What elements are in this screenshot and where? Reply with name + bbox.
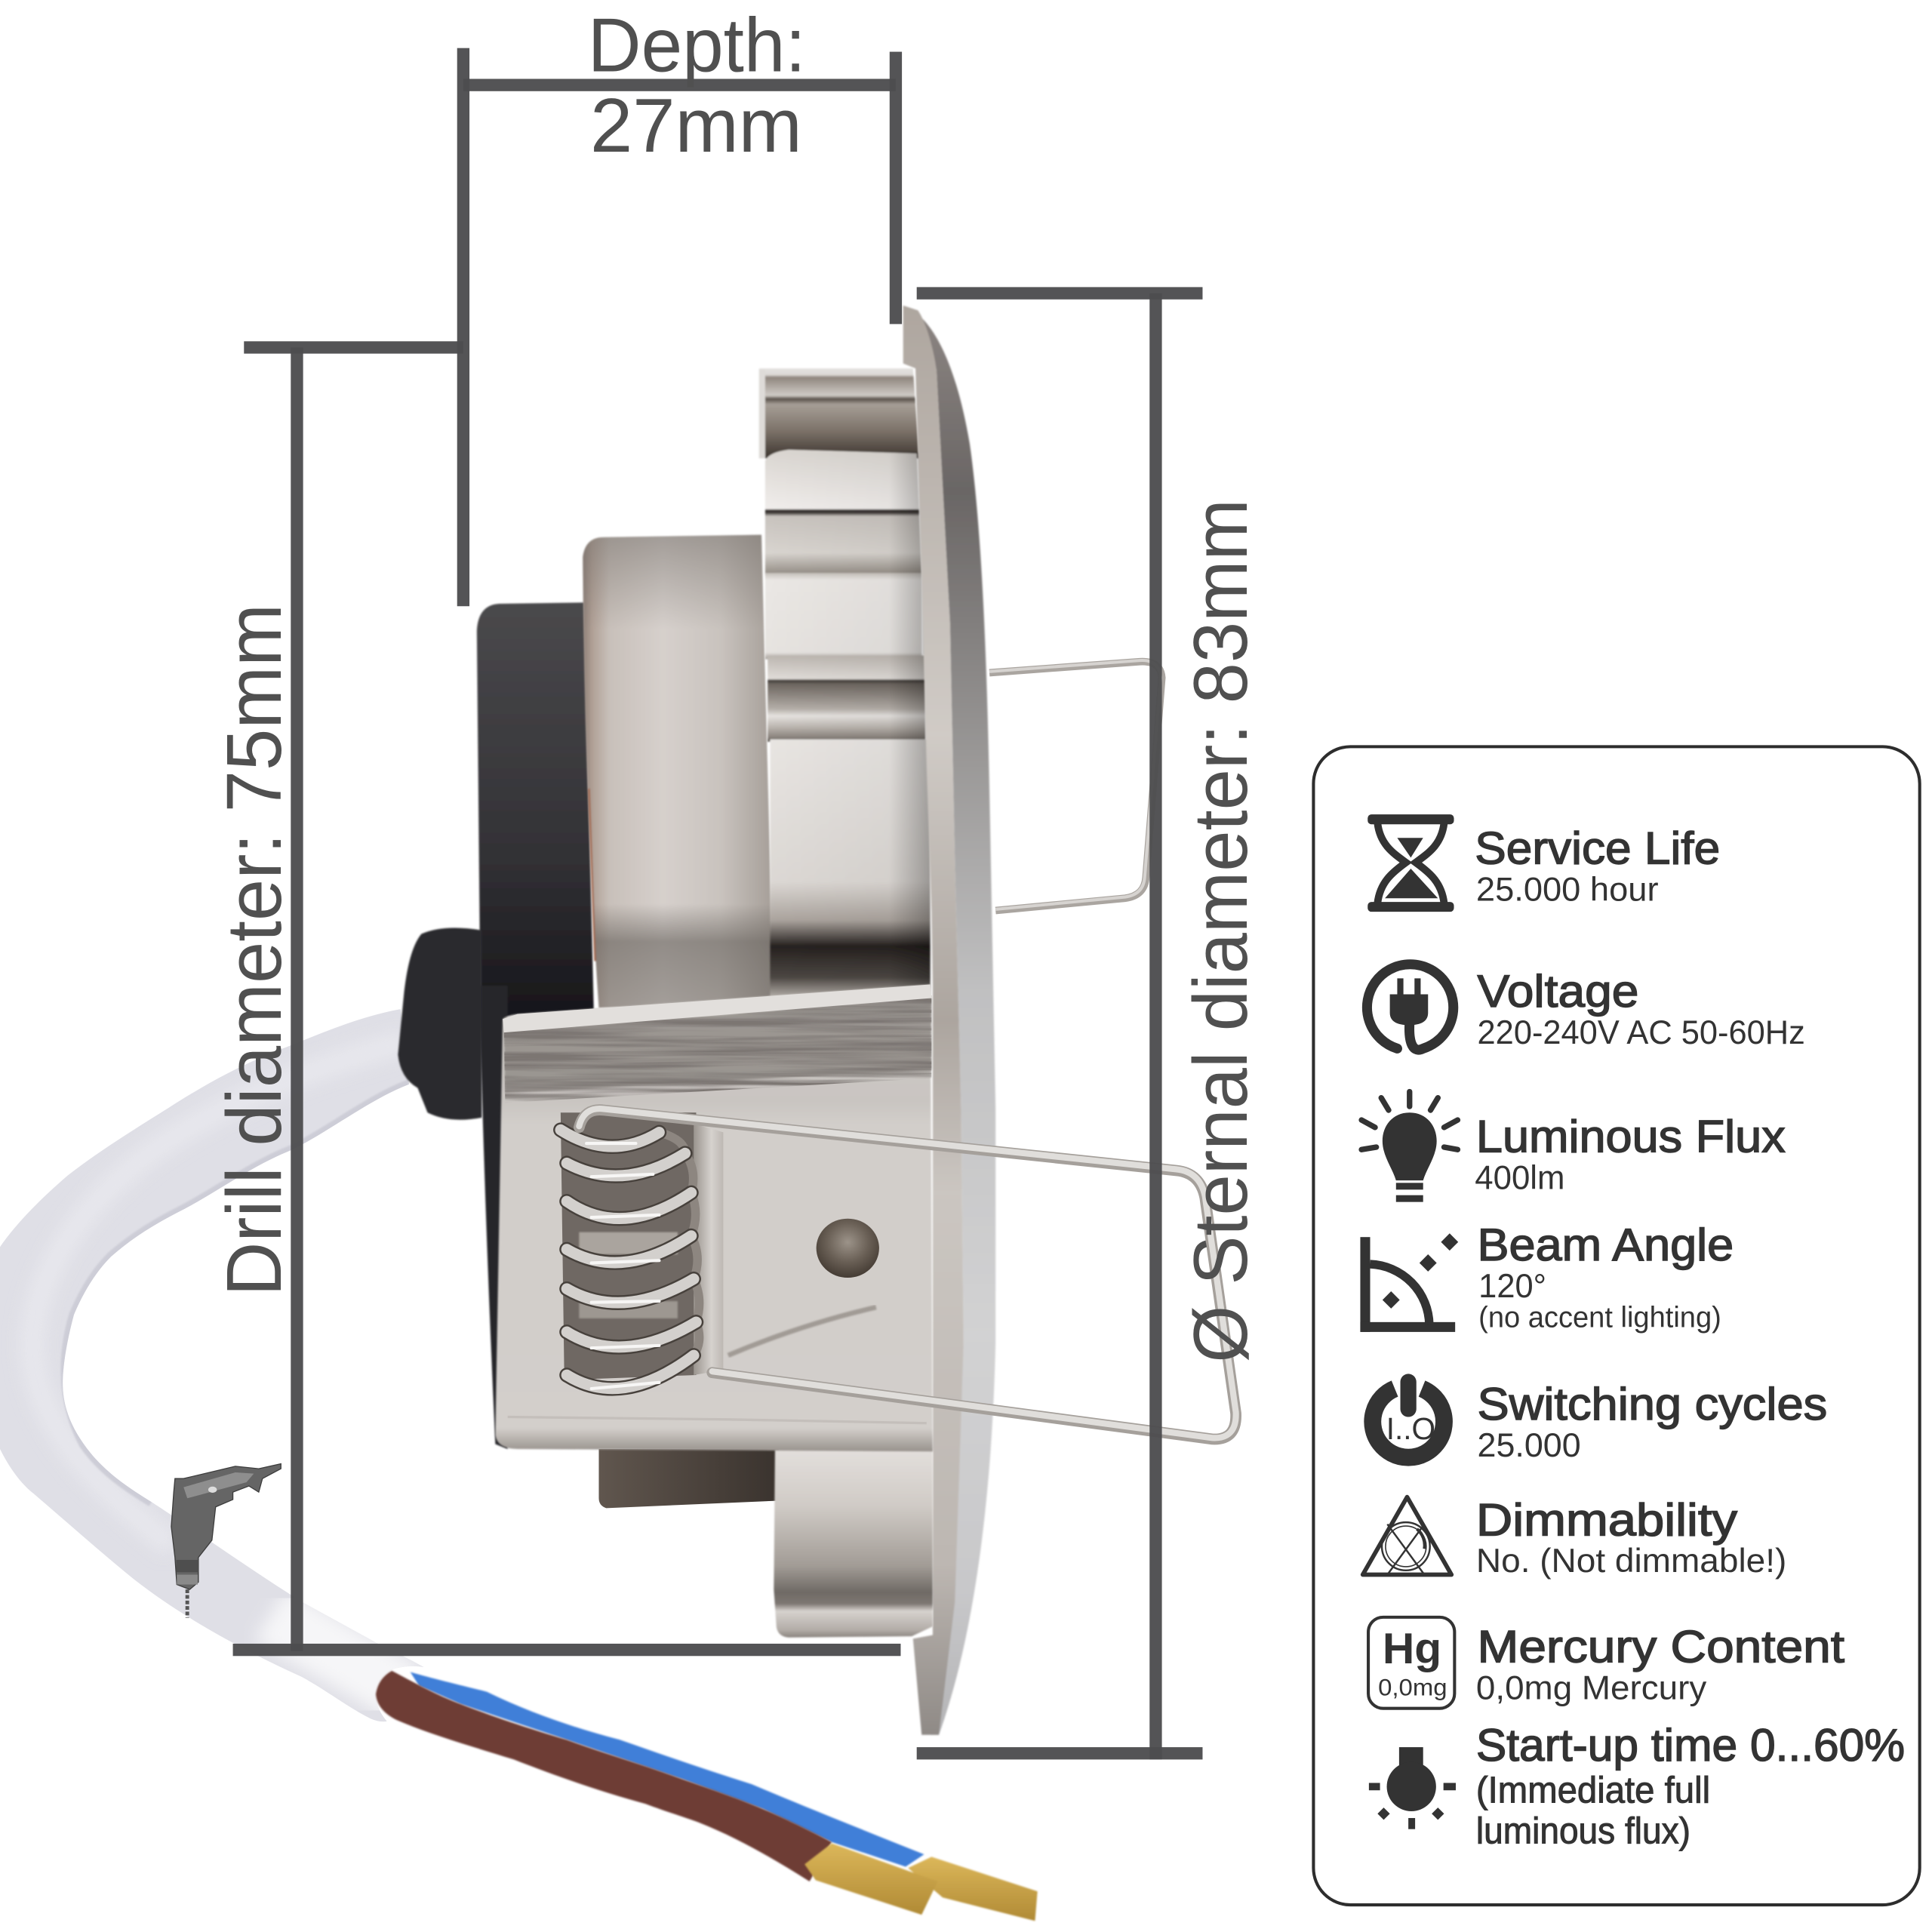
icon: beam angle [1360, 1233, 1458, 1332]
spec: dimmability [1363, 1494, 1786, 1580]
spec: dimmability: No. (Not dimmable!) [1476, 1541, 1786, 1580]
white mains cable [0, 1009, 424, 1722]
spec: voltage [1367, 964, 1805, 1051]
black cable gland [398, 928, 481, 1120]
brushed cylinder [583, 535, 774, 1008]
icon: Hg badge: Hg [1383, 1625, 1441, 1673]
icon: light bulb [1361, 1092, 1457, 1202]
rivet hole [817, 1219, 879, 1278]
spec: voltage: Voltage [1478, 965, 1638, 1017]
spec: switching cycles: Switching cycles [1478, 1378, 1827, 1429]
torsion spring coil [561, 1130, 700, 1389]
spec: voltage: 220-240V AC 50-60Hz [1478, 1013, 1805, 1051]
spec: start-up time: Start-up time 0...60% [1476, 1719, 1905, 1770]
icon: Hg badge: 0,0mg [1378, 1675, 1447, 1701]
spec: luminous flux: 400lm [1475, 1158, 1564, 1197]
wire: brown conductor [376, 1671, 832, 1881]
front bezel [903, 306, 995, 1735]
spring slot [561, 1112, 723, 1380]
rear spring clip [989, 660, 1162, 911]
icon: plug in circle [1367, 964, 1454, 1050]
lower reflector section [774, 1449, 933, 1638]
spec: luminous flux [1361, 1092, 1786, 1202]
black driver housing [477, 602, 594, 1449]
icon: electric drill [171, 1464, 281, 1618]
icon: not dimmable triangle [1363, 1497, 1451, 1575]
photo: recessed LED spotlight with cable [0, 306, 1236, 1921]
panel: specifications [1313, 746, 1920, 1905]
dimension: outer diameter: Ø Sternal diameter: 83mm [1178, 499, 1263, 1363]
spec: dimmability: Dimmability [1476, 1494, 1738, 1545]
icon: power button [1373, 1374, 1444, 1457]
spec: beam angle: (no accent lighting) [1478, 1301, 1721, 1334]
dimension: depth: 27mm [590, 83, 802, 168]
dimension: depth: Depth: [588, 3, 806, 88]
wire: blue conductor [411, 1672, 924, 1866]
spec: beam angle: 120° [1478, 1266, 1546, 1305]
icon: start-up lamp [1369, 1747, 1456, 1829]
icon: hourglass [1367, 814, 1454, 912]
front spring clip [579, 1109, 1236, 1439]
spec: start-up time: luminous flux) [1476, 1810, 1690, 1851]
reflector ring segments [759, 368, 931, 998]
dimension: depth [457, 3, 902, 606]
spec: luminous flux: Luminous Flux [1476, 1111, 1786, 1162]
dimension: drill diameter [211, 341, 900, 1656]
icon: Hg badge [1368, 1617, 1454, 1709]
spec: start-up time [1369, 1719, 1905, 1851]
spec: switching cycles [1373, 1374, 1827, 1464]
spec: service life [1367, 814, 1720, 912]
mounting bracket plate [495, 984, 933, 1451]
icon: power button: I..O [1386, 1411, 1435, 1446]
wire: copper tips [804, 1843, 1038, 1921]
dimension: drill diameter: Drill diameter: 75mm [211, 604, 297, 1297]
spec: beam angle [1360, 1219, 1734, 1334]
dimension: outer diameter [917, 287, 1263, 1759]
spec: mercury content: Mercury Content [1478, 1620, 1844, 1672]
spec: mercury content: 0,0mg Mercury [1476, 1668, 1707, 1706]
spec: service life: Service Life [1475, 822, 1720, 873]
spec: start-up time: (Immediate full [1476, 1770, 1710, 1811]
spec: mercury content [1368, 1617, 1844, 1709]
lower dark tab [598, 1449, 779, 1508]
spec: switching cycles: 25.000 [1478, 1426, 1581, 1464]
spec: beam angle: Beam Angle [1478, 1219, 1734, 1270]
spec: service life: 25.000 hour [1476, 869, 1659, 908]
